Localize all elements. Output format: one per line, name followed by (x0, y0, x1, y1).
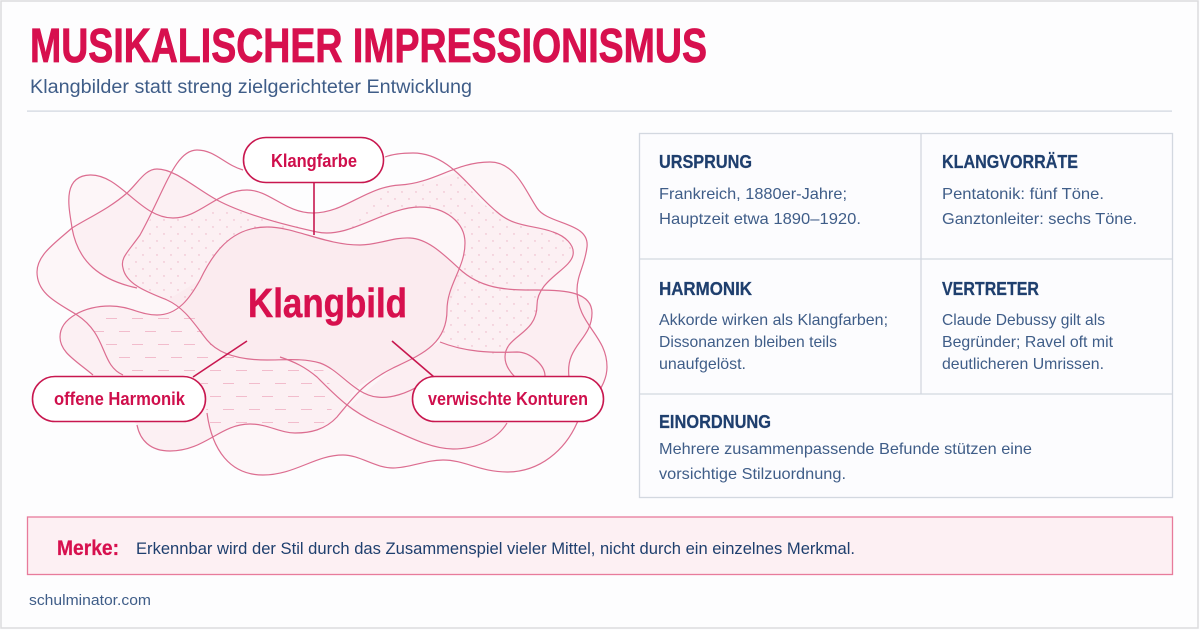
pill: verwischte Konturen: verwischte Konturen (428, 389, 588, 409)
cell: Klangvorräte: Pentatonik: fünf Töne. (942, 186, 1104, 203)
cell: Vertreter: Claude Debussy gilt als (942, 312, 1105, 329)
blob fills (37, 162, 607, 475)
cell: Einordnung: EINORDNUNG (659, 412, 771, 432)
cell: Ursprung: Frankreich, 1880er-Jahre; (659, 186, 847, 203)
pill: offene Harmonik: offene Harmonik (54, 389, 186, 409)
cell: Klangvorräte: KLANGVORRÄTE (942, 152, 1078, 172)
title: MUSIKALISCHER IMPRESSIONISMUS (30, 20, 707, 73)
cell: Einordnung: vorsichtige Stilzuordnung. (659, 466, 846, 483)
dotted texture upper left (122, 210, 317, 303)
connector: Klangfarbe to Klangbild (313, 183, 315, 235)
cell: Harmonik (659, 279, 888, 373)
facts table (639, 133, 1172, 498)
connector: offene Harmonik to Klangbild (193, 341, 247, 377)
footer source: schulminator.com (29, 592, 151, 609)
cell: Vertreter: deutlicheren Umrissen. (942, 356, 1104, 373)
cell: Harmonik: Akkorde wirken als Klangfarben; (659, 312, 888, 329)
cell: Harmonik: unaufgelöst. (659, 356, 746, 373)
cell: Einordnung: Mehrere zusammenpassende Befunde stützen eine (659, 441, 1032, 458)
cell: Ursprung (659, 152, 861, 228)
cell: Klangvorräte: Ganztonleiter: sechs Töne. (942, 211, 1137, 228)
pill: Klangfarbe: Klangfarbe (271, 151, 357, 171)
pill: Klangfarbe (244, 138, 384, 182)
callout: Merke (28, 517, 1172, 574)
cell: Ursprung: Hauptzeit etwa 1890–1920. (659, 211, 861, 228)
central label: Klangbild: Klangbild (248, 280, 407, 326)
pill: offene Harmonik (32, 376, 206, 422)
cell: Vertreter (942, 279, 1114, 373)
blob outlines (37, 150, 607, 475)
dashed texture lower left (90, 303, 337, 433)
dotted texture upper right (317, 172, 573, 357)
diagram: overlapping sound blobs (37, 150, 607, 475)
cell: Harmonik: HARMONIK (659, 279, 752, 299)
connector: verwischte Konturen to Klangbild (392, 341, 434, 377)
cell: Ursprung: URSPRUNG (659, 152, 752, 172)
callout: Merke: Erkennbar wird der Stil durch das Zusammenspiel vieler Mittel, nicht durch ein einzelnes Merkmal. (136, 540, 855, 558)
cell: Klangvorräte (942, 152, 1137, 228)
cell: Harmonik: Dissonanzen bleiben teils (659, 334, 837, 351)
cell: Vertreter: Begründer; Ravel oft mit (942, 334, 1114, 351)
cell: Vertreter: VERTRETER (942, 279, 1039, 299)
cell: Einordnung (659, 412, 1032, 483)
callout: Merke: Merke: (57, 537, 119, 560)
pill: verwischte Konturen (412, 376, 604, 422)
subtitle: Klangbilder statt streng zielgerichteter Entwicklung (30, 77, 472, 98)
